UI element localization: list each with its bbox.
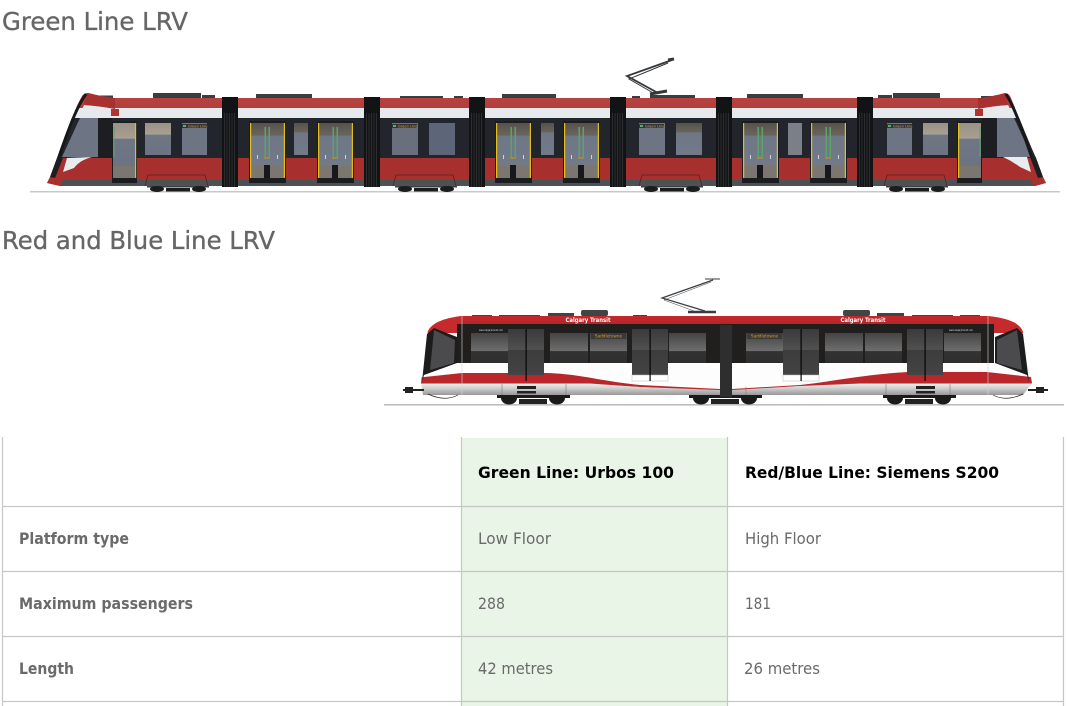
row: length: 42 metres	[478, 659, 553, 678]
doors	[508, 329, 943, 381]
row: length: Length	[19, 659, 74, 678]
column headers: Green Line: Urbos 100	[478, 463, 674, 482]
tram body	[421, 316, 1032, 395]
destination signs: Green Line	[893, 124, 913, 128]
silver skirt	[421, 384, 1032, 395]
heading: Green Line LRV: Green Line LRV	[2, 7, 188, 36]
Calgary Transit lettering: Calgary Transit	[840, 317, 886, 324]
articulations	[222, 97, 873, 187]
row: platform type: Low Floor	[478, 529, 551, 548]
row: maximum passengers: Maximum passengers	[19, 594, 193, 613]
row: platform type: Platform type	[19, 529, 129, 548]
destination signs: Green Line	[188, 124, 208, 128]
column headers: Red/Blue Line: Siemens S200	[745, 463, 999, 482]
under-frame grilles	[517, 386, 935, 394]
destination signs: Saddletowne	[595, 334, 622, 339]
row: maximum passengers: 181	[745, 594, 771, 613]
row: platform type	[19, 529, 821, 548]
row: length	[19, 659, 820, 678]
doors	[112, 121, 982, 183]
track line	[384, 404, 1064, 406]
pantograph	[662, 279, 720, 312]
rooftop equipment	[96, 93, 997, 98]
heading: Red and Blue Line LRV: Red and Blue Line LRV	[2, 226, 275, 255]
website lettering	[479, 328, 973, 332]
lower red swoosh	[415, 372, 1040, 391]
comparison table	[2, 437, 1064, 706]
destination signs: Green Line	[645, 124, 665, 128]
row: length: 26 metres	[744, 659, 820, 678]
row: platform type: High Floor	[745, 529, 821, 548]
website lettering: www.calgarytransit.com	[949, 328, 973, 332]
windshields	[422, 328, 1029, 382]
illustration: Red and Blue Line Siemens tram	[384, 279, 1064, 406]
side windows	[471, 333, 981, 363]
logos	[111, 109, 983, 116]
Green Line column highlight	[462, 438, 728, 706]
bogies	[145, 175, 948, 192]
windows	[145, 123, 948, 155]
couplers	[403, 390, 1048, 398]
central articulation	[720, 325, 732, 397]
website lettering: www.calgarytransit.com	[479, 328, 503, 332]
destination signs: Saddletowne	[751, 334, 778, 339]
illustration: Green Line Urbos tram	[30, 59, 1060, 192]
Calgary Transit lettering	[566, 317, 886, 324]
table grid	[2, 437, 1064, 706]
destination signs	[591, 333, 782, 339]
bogies	[497, 392, 956, 404]
column headers	[478, 463, 999, 482]
tram body	[40, 90, 1055, 187]
rooftop equipment	[472, 310, 980, 316]
row: maximum passengers: 288	[478, 594, 505, 613]
destination signs: Green Line	[398, 124, 418, 128]
Calgary Transit lettering: Calgary Transit	[566, 317, 611, 324]
row: maximum passengers	[19, 594, 771, 613]
pantograph	[627, 59, 674, 94]
destination signs	[182, 124, 913, 128]
track line	[30, 191, 1060, 192]
